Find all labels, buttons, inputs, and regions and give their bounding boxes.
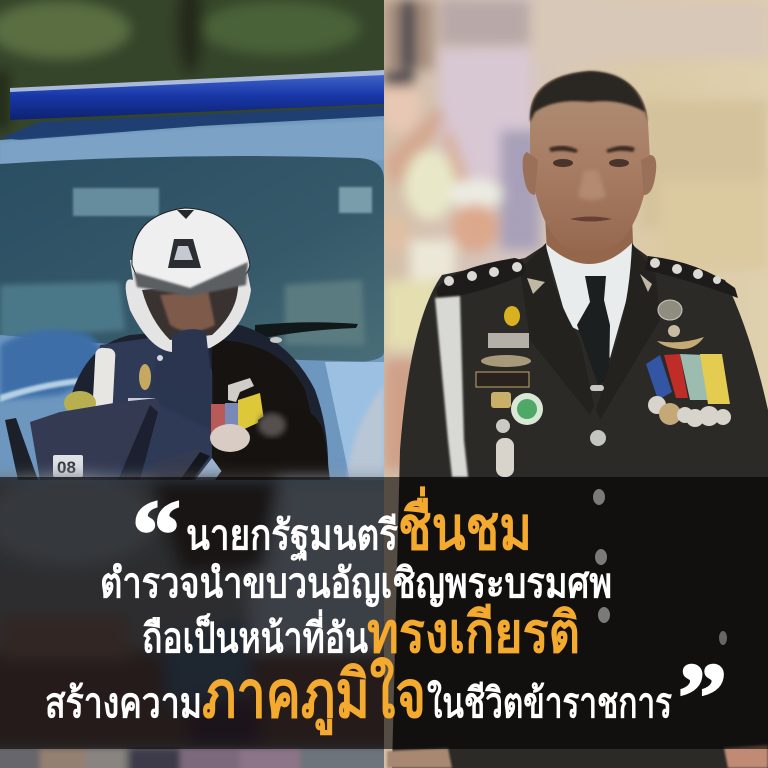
line 3: ทรงเกียรติ xyxy=(367,601,580,664)
car body xyxy=(0,112,384,520)
helmet xyxy=(126,208,251,352)
epaulettes with stars xyxy=(436,256,738,300)
line 1: นายกรัฐมนตรี xyxy=(186,512,398,562)
ribbons and medals xyxy=(210,378,264,452)
motorcycle fairing and mirrors: 08 xyxy=(57,458,76,477)
hands at the bottom xyxy=(387,745,768,768)
trees background xyxy=(0,0,384,140)
car hood xyxy=(0,335,364,362)
line 3: ถือเป็นหน้าที่อัน xyxy=(142,609,368,661)
jacket lapels xyxy=(520,243,660,420)
blurred background with people xyxy=(380,0,768,768)
uniform jacket xyxy=(392,245,768,768)
line 2: ตำรวจนำขบวนอัญเชิญพระบรมศพ xyxy=(100,560,612,607)
opening quotation mark: “ xyxy=(132,481,181,589)
motorcycle windscreen xyxy=(208,348,213,404)
head xyxy=(522,69,656,230)
motorcycle fairing and mirrors xyxy=(5,398,330,480)
jacket buttons under band xyxy=(593,489,727,645)
windshield xyxy=(0,156,384,362)
line 1: ชื่นชม xyxy=(398,486,532,562)
aiguillette and badges xyxy=(64,337,282,418)
white aiguillette cord xyxy=(435,296,514,477)
police light bar xyxy=(0,70,384,140)
blurred lower motorcycle under band xyxy=(0,475,400,768)
dark translucent text band xyxy=(0,477,768,749)
windscreen top over chin xyxy=(172,329,208,382)
white shirt and black tie xyxy=(545,243,632,385)
right chest pin, wings, ribbons and medals xyxy=(590,300,731,446)
rider jacket xyxy=(72,325,328,468)
photo: motorcycle police officer in front of a police car xyxy=(0,0,400,768)
line 4: ในชีวิตข้าราชการ xyxy=(427,679,672,726)
strip below band xyxy=(0,749,400,768)
photo: portrait of police officer in dress uniform xyxy=(380,0,768,768)
closing quotation mark: ” xyxy=(678,644,727,752)
neck xyxy=(545,221,634,264)
line 4: ภาคภูมิใจ xyxy=(202,655,426,736)
quote text xyxy=(45,486,672,736)
line 4: สร้างความ xyxy=(45,680,202,726)
left chest badges xyxy=(476,306,543,425)
